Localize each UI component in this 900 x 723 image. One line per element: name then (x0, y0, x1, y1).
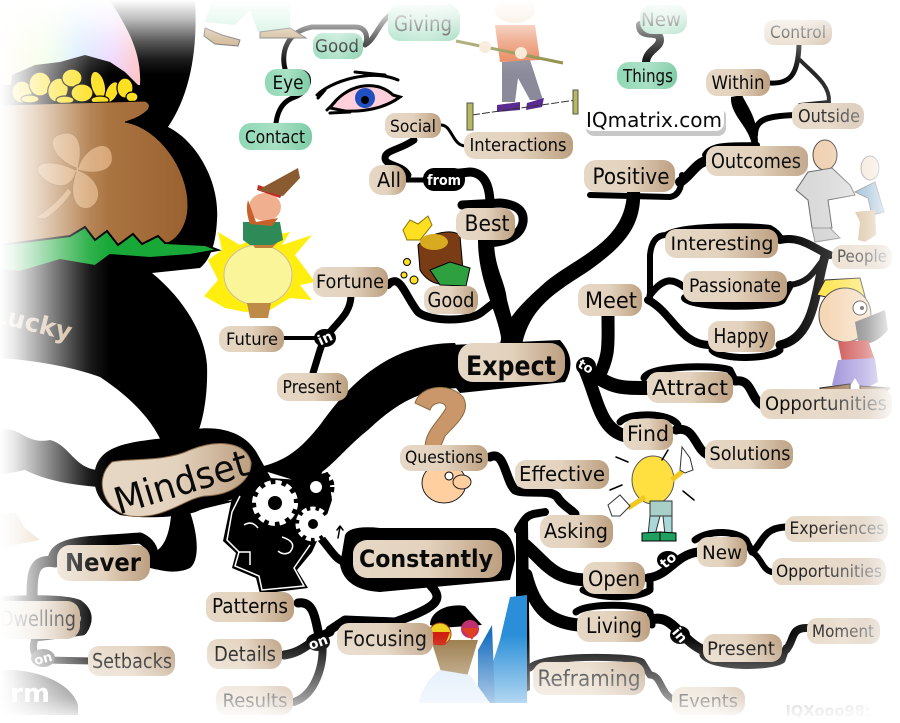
node: Giving: Giving (394, 12, 452, 36)
node: Social: Social (390, 117, 436, 137)
node: Happy: Happy (714, 324, 769, 348)
connector label: from (423, 168, 465, 191)
node: Focusing (337, 623, 433, 655)
illustration: tightrope walker (456, 0, 578, 130)
node: Dwelling (0, 601, 80, 639)
illustration: laughing man (817, 278, 890, 393)
node: Eye (265, 69, 310, 96)
node: Best: Best (464, 212, 510, 237)
illustration: legs and shoes at top (204, 0, 306, 46)
connector label: to (Open): to (657, 549, 680, 572)
node: Living (577, 611, 650, 642)
node: Opportunities (open) (772, 558, 886, 585)
node: Eye: Eye (272, 72, 304, 94)
node: Passionate (683, 271, 787, 302)
node: Asking: Asking (544, 519, 608, 543)
node: Setbacks: Setbacks (92, 649, 172, 673)
node: Fortune (313, 267, 388, 297)
node: Outcomes: Outcomes (711, 149, 801, 173)
node: Expect: Expect (466, 351, 556, 382)
node: Reframing: Reframing (538, 667, 640, 692)
gear small (300, 471, 332, 503)
branches: Mindset left and Never (0, 428, 272, 715)
node: Positive: Positive (592, 165, 670, 190)
node: Good (top): Good (315, 36, 359, 57)
node: Opportunities (attract) (760, 389, 892, 419)
illustration: lightbulb character (608, 447, 694, 541)
node: Open: Open (588, 567, 640, 591)
node: Contact (239, 123, 312, 150)
node: Present (living): Present (707, 638, 775, 660)
node: Find: Find (627, 422, 669, 446)
node: Open (583, 562, 645, 594)
node: Events (672, 687, 745, 715)
node: People: People (837, 247, 887, 267)
illustration: businessmen handshake (796, 140, 884, 242)
connector label: in (Living): in (668, 625, 690, 646)
node: Interactions: Interactions (470, 135, 566, 156)
node: Constantly (353, 540, 502, 578)
node: Focusing: Focusing (343, 627, 427, 651)
node: New (top): New (641, 9, 681, 31)
clover (35, 133, 112, 219)
branches: Expect downward (447, 340, 762, 455)
gear large (255, 483, 295, 523)
node: Living: Living (586, 614, 642, 638)
node: Good (fortune): Good (428, 288, 474, 312)
branches: Constantly (284, 456, 808, 702)
rainbow (0, 0, 140, 85)
node: Find (623, 419, 673, 450)
node: Positive (584, 160, 675, 192)
node: Control: Control (770, 23, 826, 43)
node: Reframing (533, 662, 645, 695)
illustration: question mark and face (415, 387, 471, 503)
pot body (0, 101, 188, 244)
node: Meet: Meet (585, 289, 637, 314)
node: Solutions: Solutions (710, 443, 790, 465)
node: Interesting (665, 229, 778, 258)
node: Within: Within (712, 72, 764, 94)
node: Best (456, 208, 515, 240)
text: partial word on dark blob: rm (10, 679, 50, 709)
node: Future: Future (226, 330, 278, 350)
illustration: money pot (401, 216, 470, 286)
node: Patterns: Patterns (212, 594, 288, 618)
node: Events: Events (678, 691, 738, 712)
node: Outside: Outside (798, 106, 860, 127)
node: Meet (578, 284, 642, 316)
gear medium (298, 509, 328, 539)
node: Giving (388, 5, 460, 41)
icon: faded cake at left (0, 512, 40, 548)
branches: Expect upward (284, 125, 640, 373)
node: Interesting: Interesting (670, 233, 774, 255)
node: Things: Things (622, 66, 673, 87)
node: Attract: Attract (652, 376, 728, 400)
illustration: person with colourful brain and city (418, 595, 527, 703)
node: Present (fortune): Present (282, 377, 342, 398)
node: Details: Details (214, 642, 276, 666)
grass (0, 227, 218, 272)
label: IQmatrix.com: IQmatrix.com (586, 108, 722, 132)
node: Never: Never (65, 548, 142, 577)
node: Moment: Moment (812, 622, 874, 642)
branches: Meet (598, 226, 830, 378)
connector label: on (Never): on (33, 650, 54, 669)
node: Effective: Effective (519, 462, 605, 486)
branches: top green (276, 7, 660, 123)
connector label: from: from (427, 173, 461, 189)
connector label: on (Focusing): on (306, 632, 330, 654)
node: Results: Results (222, 690, 288, 712)
node: New (top) (640, 5, 687, 34)
node: All (369, 165, 406, 195)
node: Questions: Questions (405, 448, 483, 468)
node: Things (617, 62, 677, 89)
node: Experiences: Experiences (790, 519, 885, 539)
node: Dwelling: Dwelling (0, 607, 76, 631)
gold coins (8, 55, 138, 105)
node: Present (fortune) (277, 373, 348, 401)
node: Constantly: Constantly (359, 545, 493, 573)
pot of gold silhouette (0, 0, 265, 480)
node: New (open): New (702, 542, 742, 564)
node: Asking (540, 515, 613, 548)
node: Fortune: Fortune (316, 271, 384, 293)
connector label: to (Expect): to (575, 357, 596, 378)
node: New (open) (697, 537, 747, 567)
node: Contact: Contact (245, 127, 305, 148)
branches: Positive and Outcomes (590, 45, 829, 197)
node: Attract (647, 372, 733, 403)
node: Results (216, 686, 293, 715)
node: All: All (377, 168, 401, 192)
watermark: IQXoooo: IQXooo98: (786, 702, 870, 720)
node: Solutions (705, 440, 793, 469)
illustration: eye (317, 72, 400, 113)
connector label: in: in (315, 329, 335, 349)
icon: head with gears (223, 471, 343, 594)
node: Future (219, 326, 284, 352)
node: Happy (708, 321, 775, 352)
illustration: leprechaun on gold ball (204, 168, 315, 318)
node: Opportunities (open): Opportunities (776, 562, 882, 582)
node: Opportunities (attract): Opportunities (765, 393, 887, 415)
main branch: Mindset to Expect (255, 343, 475, 482)
node: Mindset: Mindset (109, 442, 253, 523)
node: Passionate: Passionate (689, 275, 781, 297)
